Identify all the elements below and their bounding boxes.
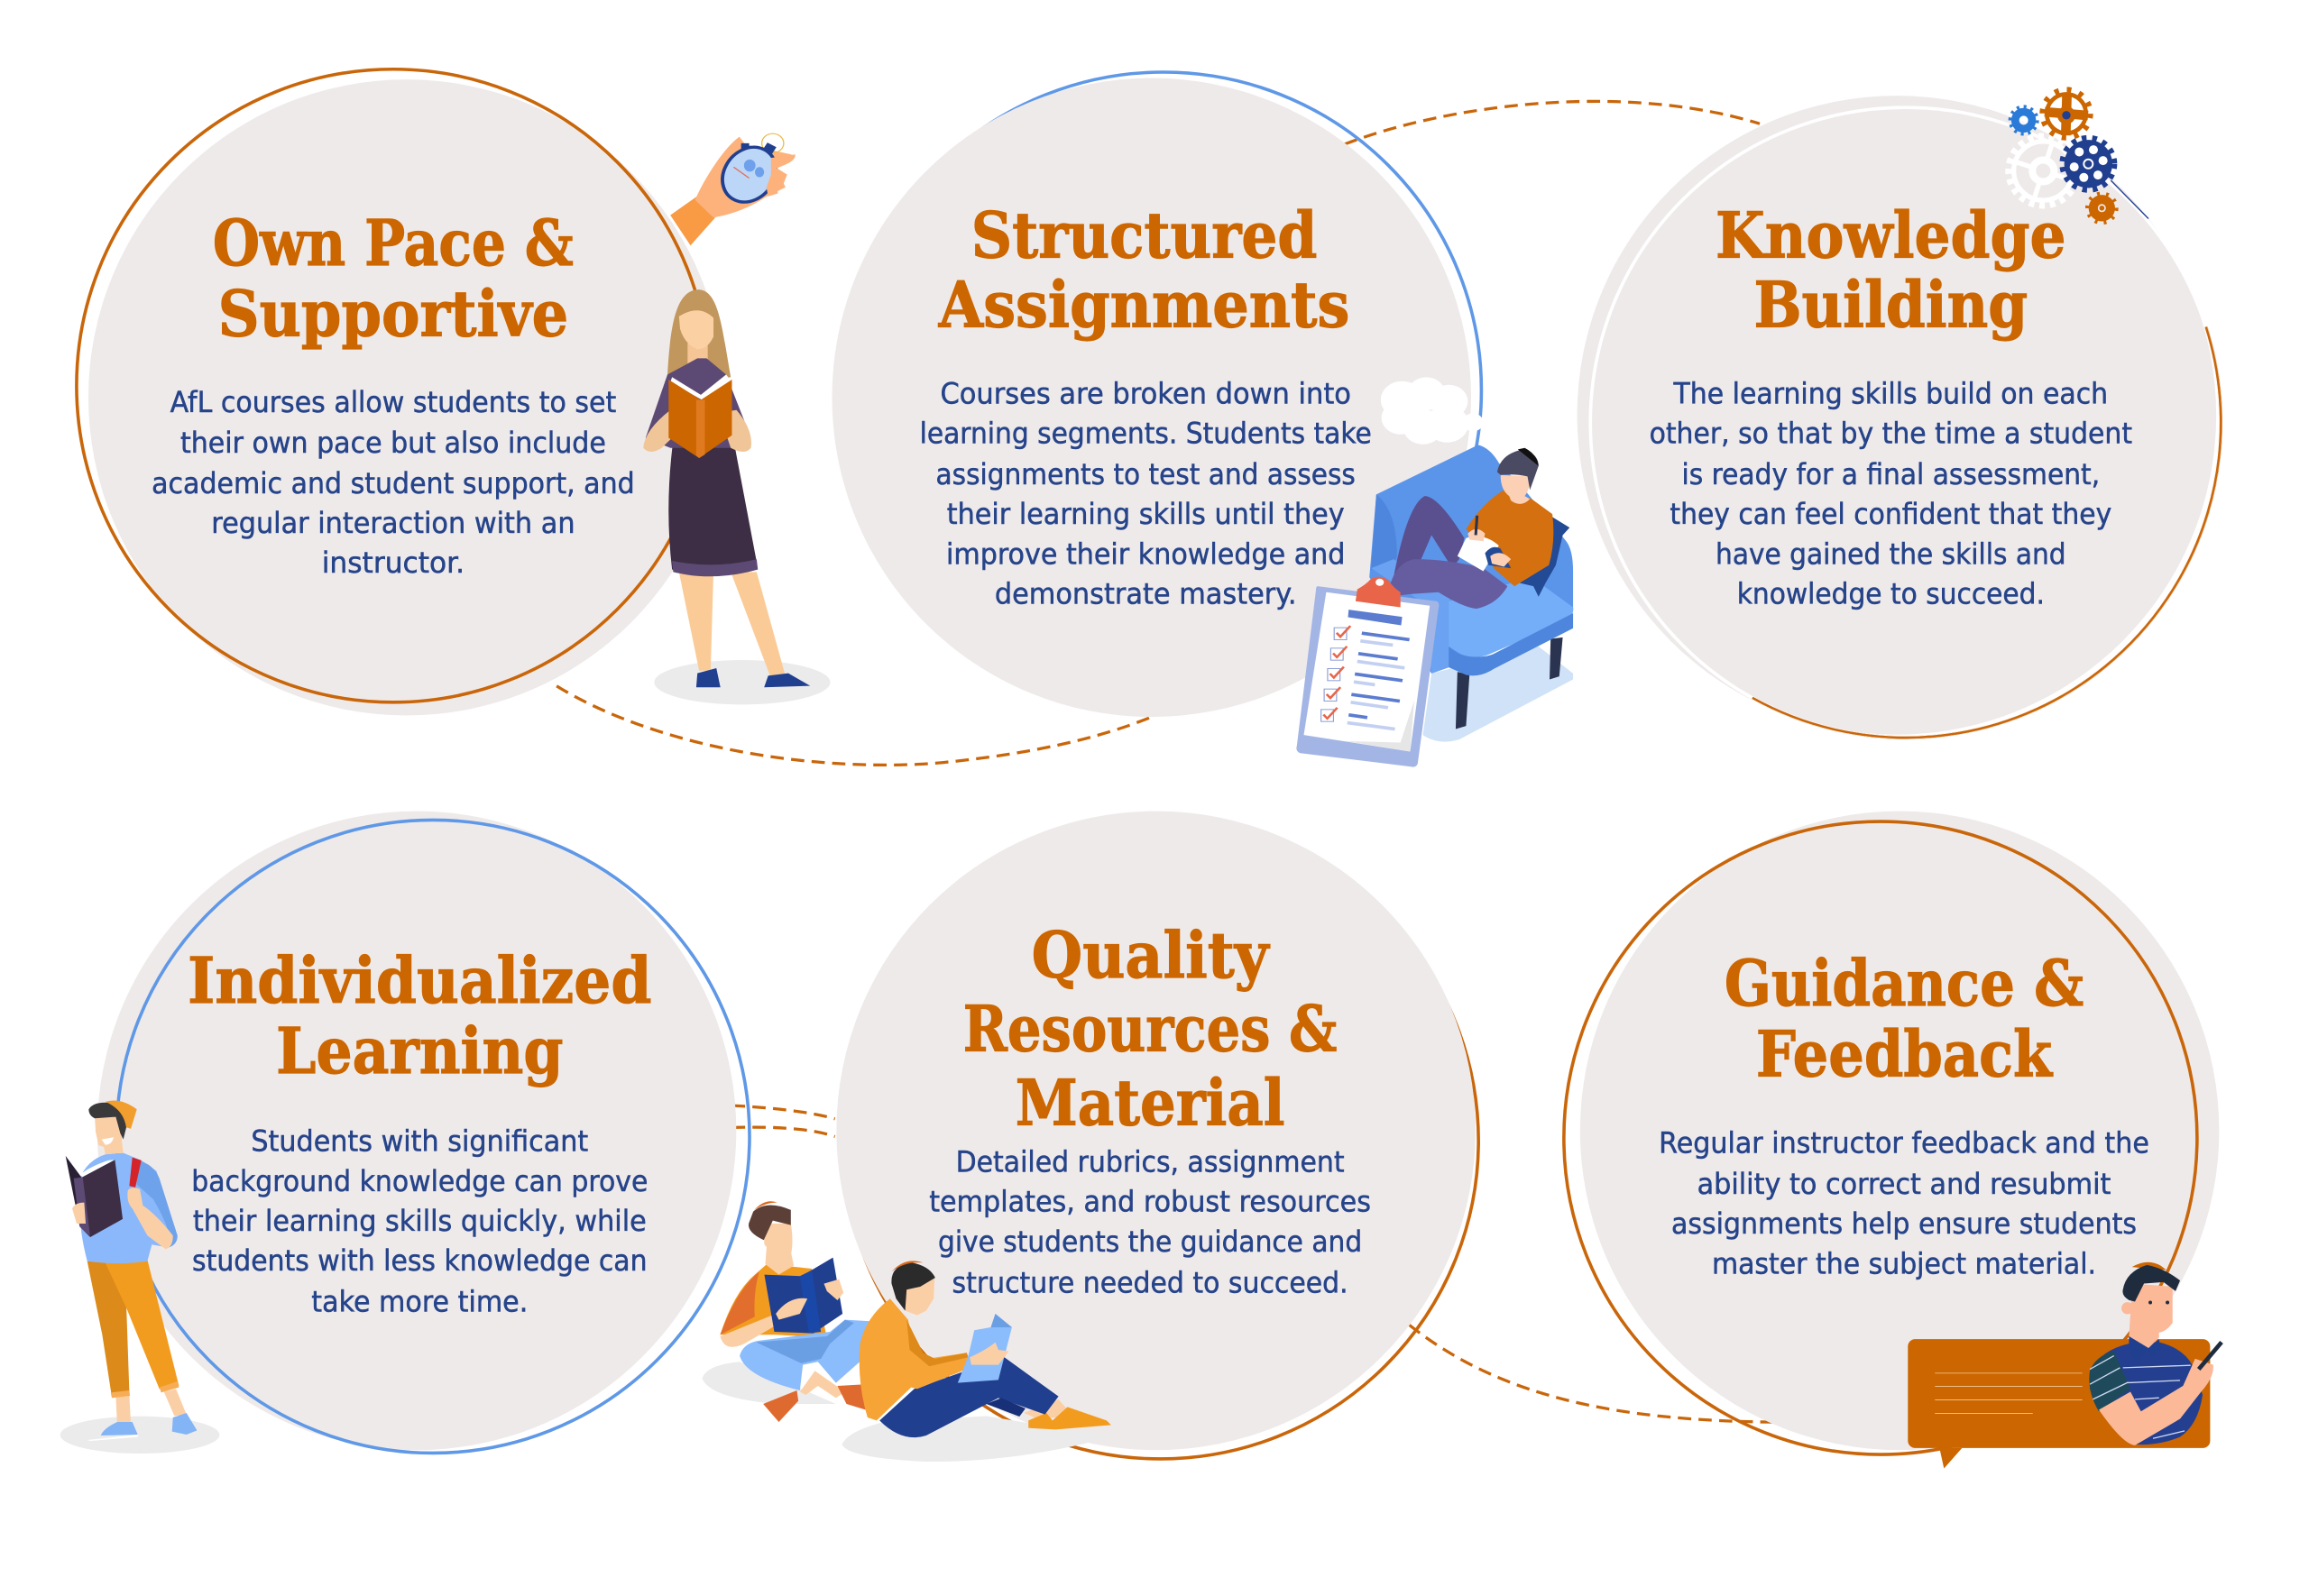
heading: quality resources and material: Quality [1032,918,1271,993]
text: quality resources body: templates, and robust resources [929,1185,1371,1219]
heading: quality resources and material [963,918,1337,1140]
text: own pace body: regular interaction with an [211,506,575,540]
text: individualized learning body: their learning skills quickly, while [193,1204,647,1238]
text: own pace body [152,385,635,580]
illustration: man writing in an armchair [1369,445,1573,742]
text: knowledge building body: The learning skills build on each [1673,376,2108,410]
text: guidance and feedback body: Regular instructor feedback and the [1659,1125,2149,1160]
panel: structured assignments [832,72,1481,717]
text: individualized learning body: background knowledge can prove [191,1164,648,1198]
heading: knowledge building: Knowledge [1716,198,2066,273]
text: individualized learning body: students with less knowledge can [192,1243,648,1278]
text: individualized learning body: take more time. [311,1285,528,1319]
panel: individualized learning [97,812,750,1453]
heading: quality resources and material: Material [1016,1065,1284,1140]
heading: guidance and feedback [1725,946,2084,1091]
heading: own pace [213,206,574,351]
heading: knowledge building [1716,198,2066,342]
icon: hand holding stopwatch [670,133,796,245]
heading: individualized learning: Learning [276,1014,563,1088]
text: structured assignments body: demonstrate mastery. [995,576,1297,610]
icon: navy gear [2062,138,2148,218]
text: guidance and feedback body: ability to correct and resubmit [1697,1167,2111,1201]
heading: individualized learning: Individualized [188,943,651,1018]
text: guidance and feedback body: assignments help ensure students [1671,1206,2137,1241]
heading: own pace: Supportive [218,276,568,351]
text: structured assignments body: Courses are broken down into [940,376,1351,410]
illustration: woman reading a book [643,289,831,704]
heading: quality resources and material: Resources & [963,992,1337,1067]
dashed connector: panel 4 to panel 5 [731,1105,835,1136]
illustration: clipboard checklist [1296,577,1439,767]
heading: guidance and feedback: Guidance & [1725,946,2084,1021]
text: quality resources body: structure needed to succeed. [952,1265,1348,1299]
dashed connector: panel 2 to panel 3 [1345,101,1760,144]
text: quality resources body: give students the guidance and [938,1225,1362,1259]
heading: structured assignments: Structured [971,198,1317,273]
illustration: thought cloud [1381,377,1484,445]
heading: structured assignments [938,198,1349,342]
speech bubble [1908,1339,2210,1469]
text: quality resources body [929,1145,1371,1299]
man holding phone [2089,1262,2222,1445]
panel: own pace and supportive [77,69,724,715]
icon: small orange gear [2087,194,2116,223]
text: knowledge building body: knowledge to succeed. [1737,576,2045,610]
text: own pace body: academic and student support, and [152,466,635,500]
heading: own pace: Own Pace & [213,206,574,280]
text: knowledge building body: is ready for a final assessment, [1681,457,2100,491]
text: guidance and feedback body: master the subject material. [1712,1246,2096,1280]
text: knowledge building body: they can feel confident that they [1670,497,2111,531]
text: knowledge building body: have gained the skills and [1716,537,2066,571]
text: own pace body: AfL courses allow students to set [170,385,616,419]
text: structured assignments body: assignments to test and assess [936,457,1356,491]
heading: knowledge building: Building [1753,267,2028,342]
panel: guidance and feedback [1564,812,2219,1454]
illustration: student standing with book [60,1101,219,1454]
dashed connector: panel 5 to panel 6 [1409,1325,1774,1422]
illustration: student sitting cross-legged reading [702,1201,870,1422]
icon: orange gear [2042,89,2091,138]
panel: quality resources and material [836,812,1478,1459]
text: own pace body: instructor. [322,546,465,580]
text: knowledge building body: other, so that by the time a student [1650,416,2132,450]
text: knowledge building body [1650,376,2132,610]
heading: guidance and feedback: Feedback [1756,1016,2053,1091]
text: individualized learning body: Students with significant [251,1124,588,1159]
illustration: student leaning and reading [842,1261,1111,1462]
heading: individualized learning [188,943,651,1088]
icon: small blue gear [2010,107,2037,133]
heading: structured assignments: Assignments [938,267,1349,342]
dashed connector: panel 1 to panel 2 [557,686,1152,765]
illustration: speech bubble with man on phone [1908,1262,2222,1469]
text: structured assignments body: learning segments. Students take [920,416,1372,450]
icon: gears [2007,89,2148,223]
text: quality resources body: Detailed rubrics, assignment [956,1145,1345,1179]
text: structured assignments body [920,376,1372,610]
text: guidance and feedback body [1659,1125,2149,1280]
text: individualized learning body [191,1124,648,1319]
panel: knowledge building [1578,96,2221,738]
icon: white gear [2007,134,2079,207]
text: own pace body: their own pace but also include [180,426,606,460]
text: structured assignments body: their learning skills until they [947,497,1345,531]
text: structured assignments body: improve their knowledge and [946,537,1345,571]
